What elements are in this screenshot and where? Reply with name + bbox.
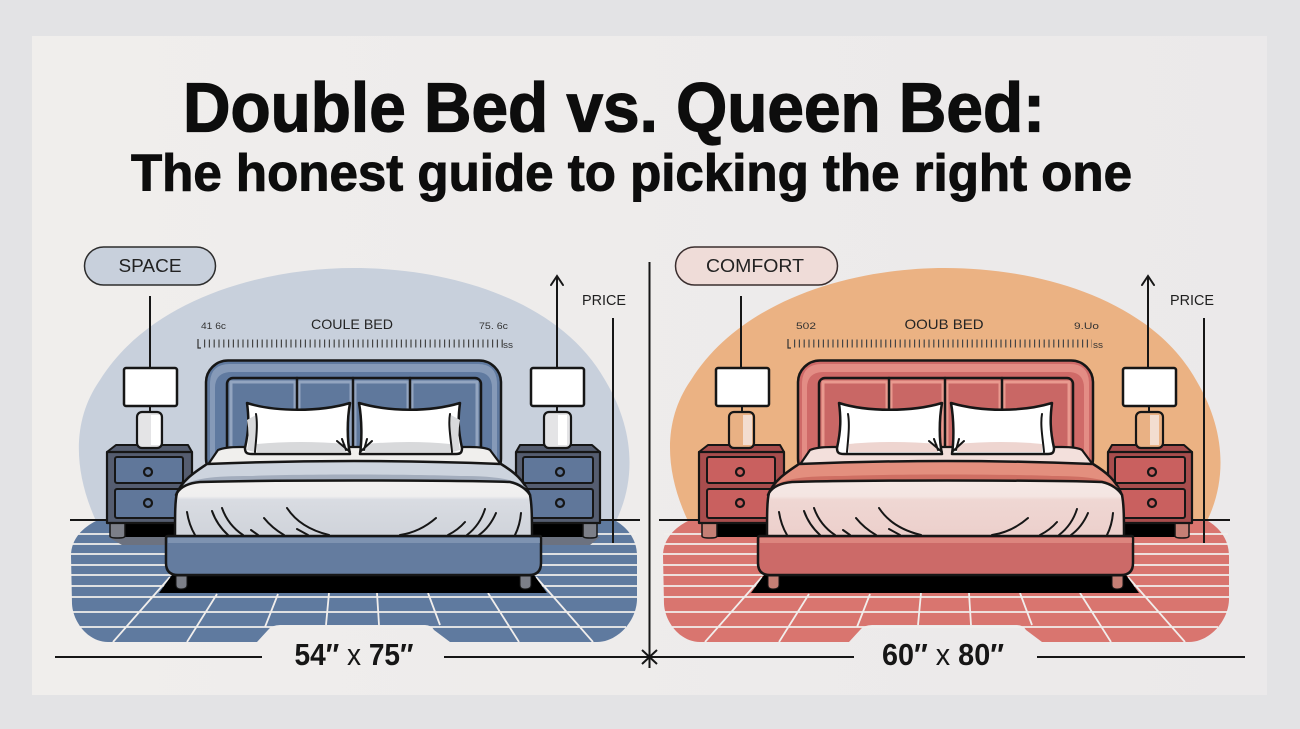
nightstand right [516, 445, 600, 538]
pill: space: SPACE [118, 256, 182, 276]
nightstand right [1108, 445, 1192, 538]
pillow left [837, 403, 942, 454]
bed name and ruler: ss [1093, 340, 1104, 350]
bed name and ruler: ss [503, 340, 514, 350]
price marker line [612, 318, 614, 543]
lamp right [1123, 368, 1176, 448]
panel: double bed [70, 247, 640, 642]
bed name and ruler [198, 316, 514, 350]
pillow left [245, 403, 350, 454]
centre divider with cross [640, 262, 659, 668]
dimension line: double [55, 656, 649, 658]
bed name and ruler: COULE BED [311, 316, 393, 332]
bed name and ruler: 502 [796, 321, 816, 332]
bed frame [758, 536, 1133, 575]
lamp leader line [149, 296, 151, 368]
bed name and ruler: 41 6c [201, 321, 226, 332]
dimension: double bed size: 54″ x 75″ [294, 637, 414, 672]
lamp left [124, 368, 177, 448]
pill: space [84, 247, 216, 285]
headboard [798, 360, 1093, 480]
bed name and ruler: 9.Uo [1074, 321, 1099, 332]
nightstand left [699, 445, 784, 538]
label: price: PRICE [582, 293, 626, 309]
floor tiles [663, 521, 1229, 642]
bed legs [176, 576, 531, 589]
pill: comfort [676, 247, 838, 285]
bed sheet [207, 447, 502, 466]
lamp left [716, 368, 769, 448]
lamp right [531, 368, 584, 448]
pillow right [951, 403, 1054, 454]
title: The honest guide to picking the right one [131, 144, 1132, 202]
bed skirt [767, 480, 1124, 537]
bed name and ruler [788, 316, 1104, 350]
bed name and ruler: 75. 6c [479, 321, 508, 332]
title [131, 68, 1132, 202]
bed legs [768, 576, 1123, 589]
bed illustration [699, 360, 1192, 593]
floor tiles [71, 521, 637, 642]
shadow under bed [125, 523, 590, 593]
nightstand left [107, 445, 192, 538]
duvet shadow band [772, 474, 1119, 488]
bed name and ruler: OOUB BED [904, 316, 984, 332]
pillow right [359, 403, 462, 454]
bed skirt [175, 480, 532, 537]
lamp leader line [740, 296, 742, 368]
bed sheet [799, 447, 1094, 466]
ground line [659, 519, 1230, 521]
dimension line: queen [649, 656, 1245, 658]
bed frame [166, 536, 541, 575]
backdrop: orange dome [670, 268, 1221, 521]
backdrop: blue dome [79, 268, 630, 521]
shadow under bed [717, 523, 1182, 593]
label: price: PRICE [1170, 293, 1214, 309]
ground line [70, 519, 640, 521]
duvet fold [176, 461, 530, 495]
arrow up [551, 276, 563, 368]
headboard [206, 360, 501, 480]
duvet shadow band [180, 474, 527, 488]
arrow up [1142, 276, 1154, 368]
duvet fold [768, 461, 1122, 495]
dimension: queen bed size: 60″ x 80″ [882, 637, 1004, 672]
price marker line [1203, 318, 1205, 543]
pill: comfort: COMFORT [706, 256, 804, 276]
title: Double Bed vs. Queen Bed: [183, 68, 1045, 146]
panel: queen bed [659, 247, 1230, 642]
